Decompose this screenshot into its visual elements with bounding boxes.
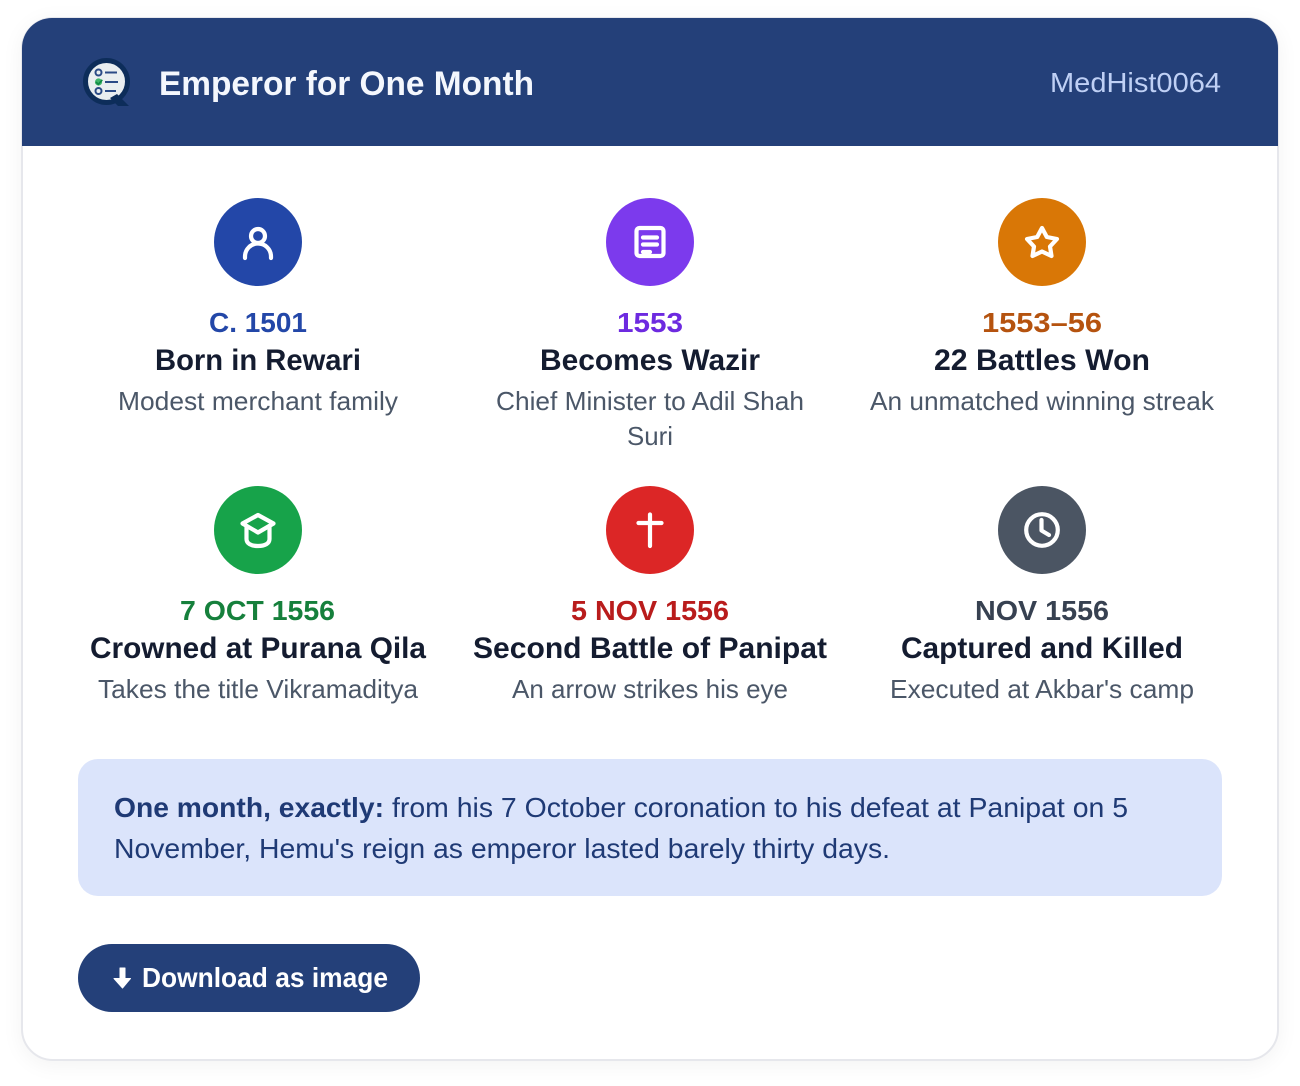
description: Takes the title Vikramaditya xyxy=(98,674,419,704)
icon: down arrow xyxy=(114,968,130,988)
date: 5 NOV 1556 xyxy=(571,595,729,626)
icon: document xyxy=(606,198,694,286)
date: C. 1501 xyxy=(209,307,307,338)
callout text: from his 7 October coronation to his defeat at Panipat on 5 xyxy=(392,792,1128,823)
title: Emperor for One Month xyxy=(159,65,534,103)
icon: quiz logo xyxy=(86,60,129,106)
heading: 22 Battles Won xyxy=(934,344,1150,377)
icon: person xyxy=(214,198,302,286)
icon: cross xyxy=(606,486,694,574)
date: 7 OCT 1556 xyxy=(180,595,335,626)
callout text: November, Hemu's reign as emperor lasted barely thirty days. xyxy=(114,833,890,864)
heading: Second Battle of Panipat xyxy=(473,632,827,665)
heading: Born in Rewari xyxy=(155,344,361,377)
icon: clock xyxy=(998,486,1086,574)
description: Suri xyxy=(627,421,673,451)
description: An unmatched winning streak xyxy=(870,386,1215,416)
heading: Becomes Wazir xyxy=(540,344,760,377)
callout text: One month, exactly: xyxy=(114,792,384,823)
icon: star xyxy=(998,198,1086,286)
date: NOV 1556 xyxy=(975,595,1109,626)
milestone: 22 battles won xyxy=(870,198,1215,416)
milestone: captured and killed xyxy=(890,486,1194,704)
download button xyxy=(78,944,420,1012)
heading: Crowned at Purana Qila xyxy=(90,632,426,665)
callout text xyxy=(114,792,1128,864)
description: Modest merchant family xyxy=(118,386,398,416)
milestone: crowned at Purana Qila xyxy=(90,486,426,704)
milestone: becomes Wazir xyxy=(496,198,804,451)
date: 1553–56 xyxy=(982,307,1102,338)
heading: Captured and Killed xyxy=(901,632,1183,665)
callout xyxy=(78,759,1222,896)
date: 1553 xyxy=(617,307,683,338)
icon: graduation cap xyxy=(214,486,302,574)
milestone: second battle of Panipat xyxy=(473,486,827,704)
header band xyxy=(22,18,1278,146)
description xyxy=(496,386,804,451)
description: An arrow strikes his eye xyxy=(512,674,788,704)
description: Chief Minister to Adil Shah xyxy=(496,386,804,416)
milestone: born in Rewari xyxy=(118,198,398,416)
description: Executed at Akbar's camp xyxy=(890,674,1194,704)
quiz id: MedHist0064 xyxy=(1050,67,1221,98)
button label: Download as image xyxy=(142,962,388,993)
